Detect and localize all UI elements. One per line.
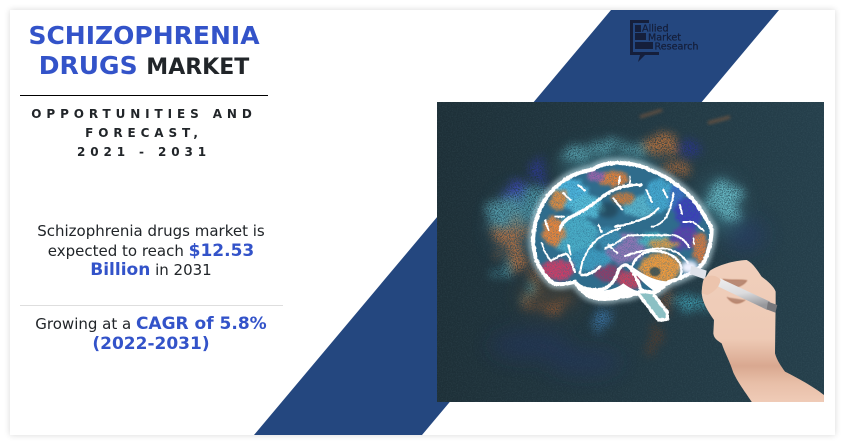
photo background [437, 102, 824, 402]
glow outline [533, 163, 712, 299]
logo wordmark [642, 24, 699, 53]
chalk smudges around the brain [485, 110, 765, 374]
title [28, 21, 260, 80]
logo: Allied Market Research [630, 20, 699, 62]
logo wordmark: Allied [642, 24, 669, 34]
brain [533, 163, 712, 320]
subtitle: FORECAST, [85, 126, 203, 140]
logo wordmark: Research [654, 42, 699, 53]
coloured chalk inside the brain [541, 170, 707, 290]
title: DRUGS MARKET [39, 51, 249, 80]
subtitle [31, 107, 257, 159]
brain stem [637, 292, 667, 320]
subtitle: OPPORTUNITIES AND [31, 107, 257, 121]
stat: market value: Schizophrenia drugs market is [37, 222, 265, 240]
pen [690, 266, 777, 313]
finger shading [723, 279, 747, 303]
stat: CAGR: Growing at a CAGR of 5.8% [35, 314, 267, 334]
logo icon [630, 20, 659, 62]
title: SCHIZOPHRENIA [28, 21, 260, 50]
stat: market value: Billion in 2031 [90, 260, 212, 280]
stat: CAGR: (2022-2031) [92, 334, 210, 354]
white contour and fold lines [533, 163, 712, 299]
divider between stats [20, 305, 283, 306]
logo wordmark: Market [648, 32, 681, 44]
brain body [533, 163, 712, 299]
hand holding pen [690, 260, 824, 403]
hand back [702, 260, 824, 403]
thumb over pen [702, 276, 721, 295]
diagonal blue band [254, 10, 779, 435]
stat: market value: expected to reach $12.53 [48, 240, 254, 260]
artwork: band, photo and logo [254, 10, 824, 435]
divider under title [20, 95, 268, 96]
stat: market value [37, 222, 265, 280]
pen light glow [681, 261, 698, 274]
white band of lower lobe [584, 283, 638, 298]
photo: brain drawn on chalkboard [437, 102, 824, 403]
subtitle: 2021 - 2031 [77, 145, 211, 159]
stat: CAGR [35, 314, 267, 354]
